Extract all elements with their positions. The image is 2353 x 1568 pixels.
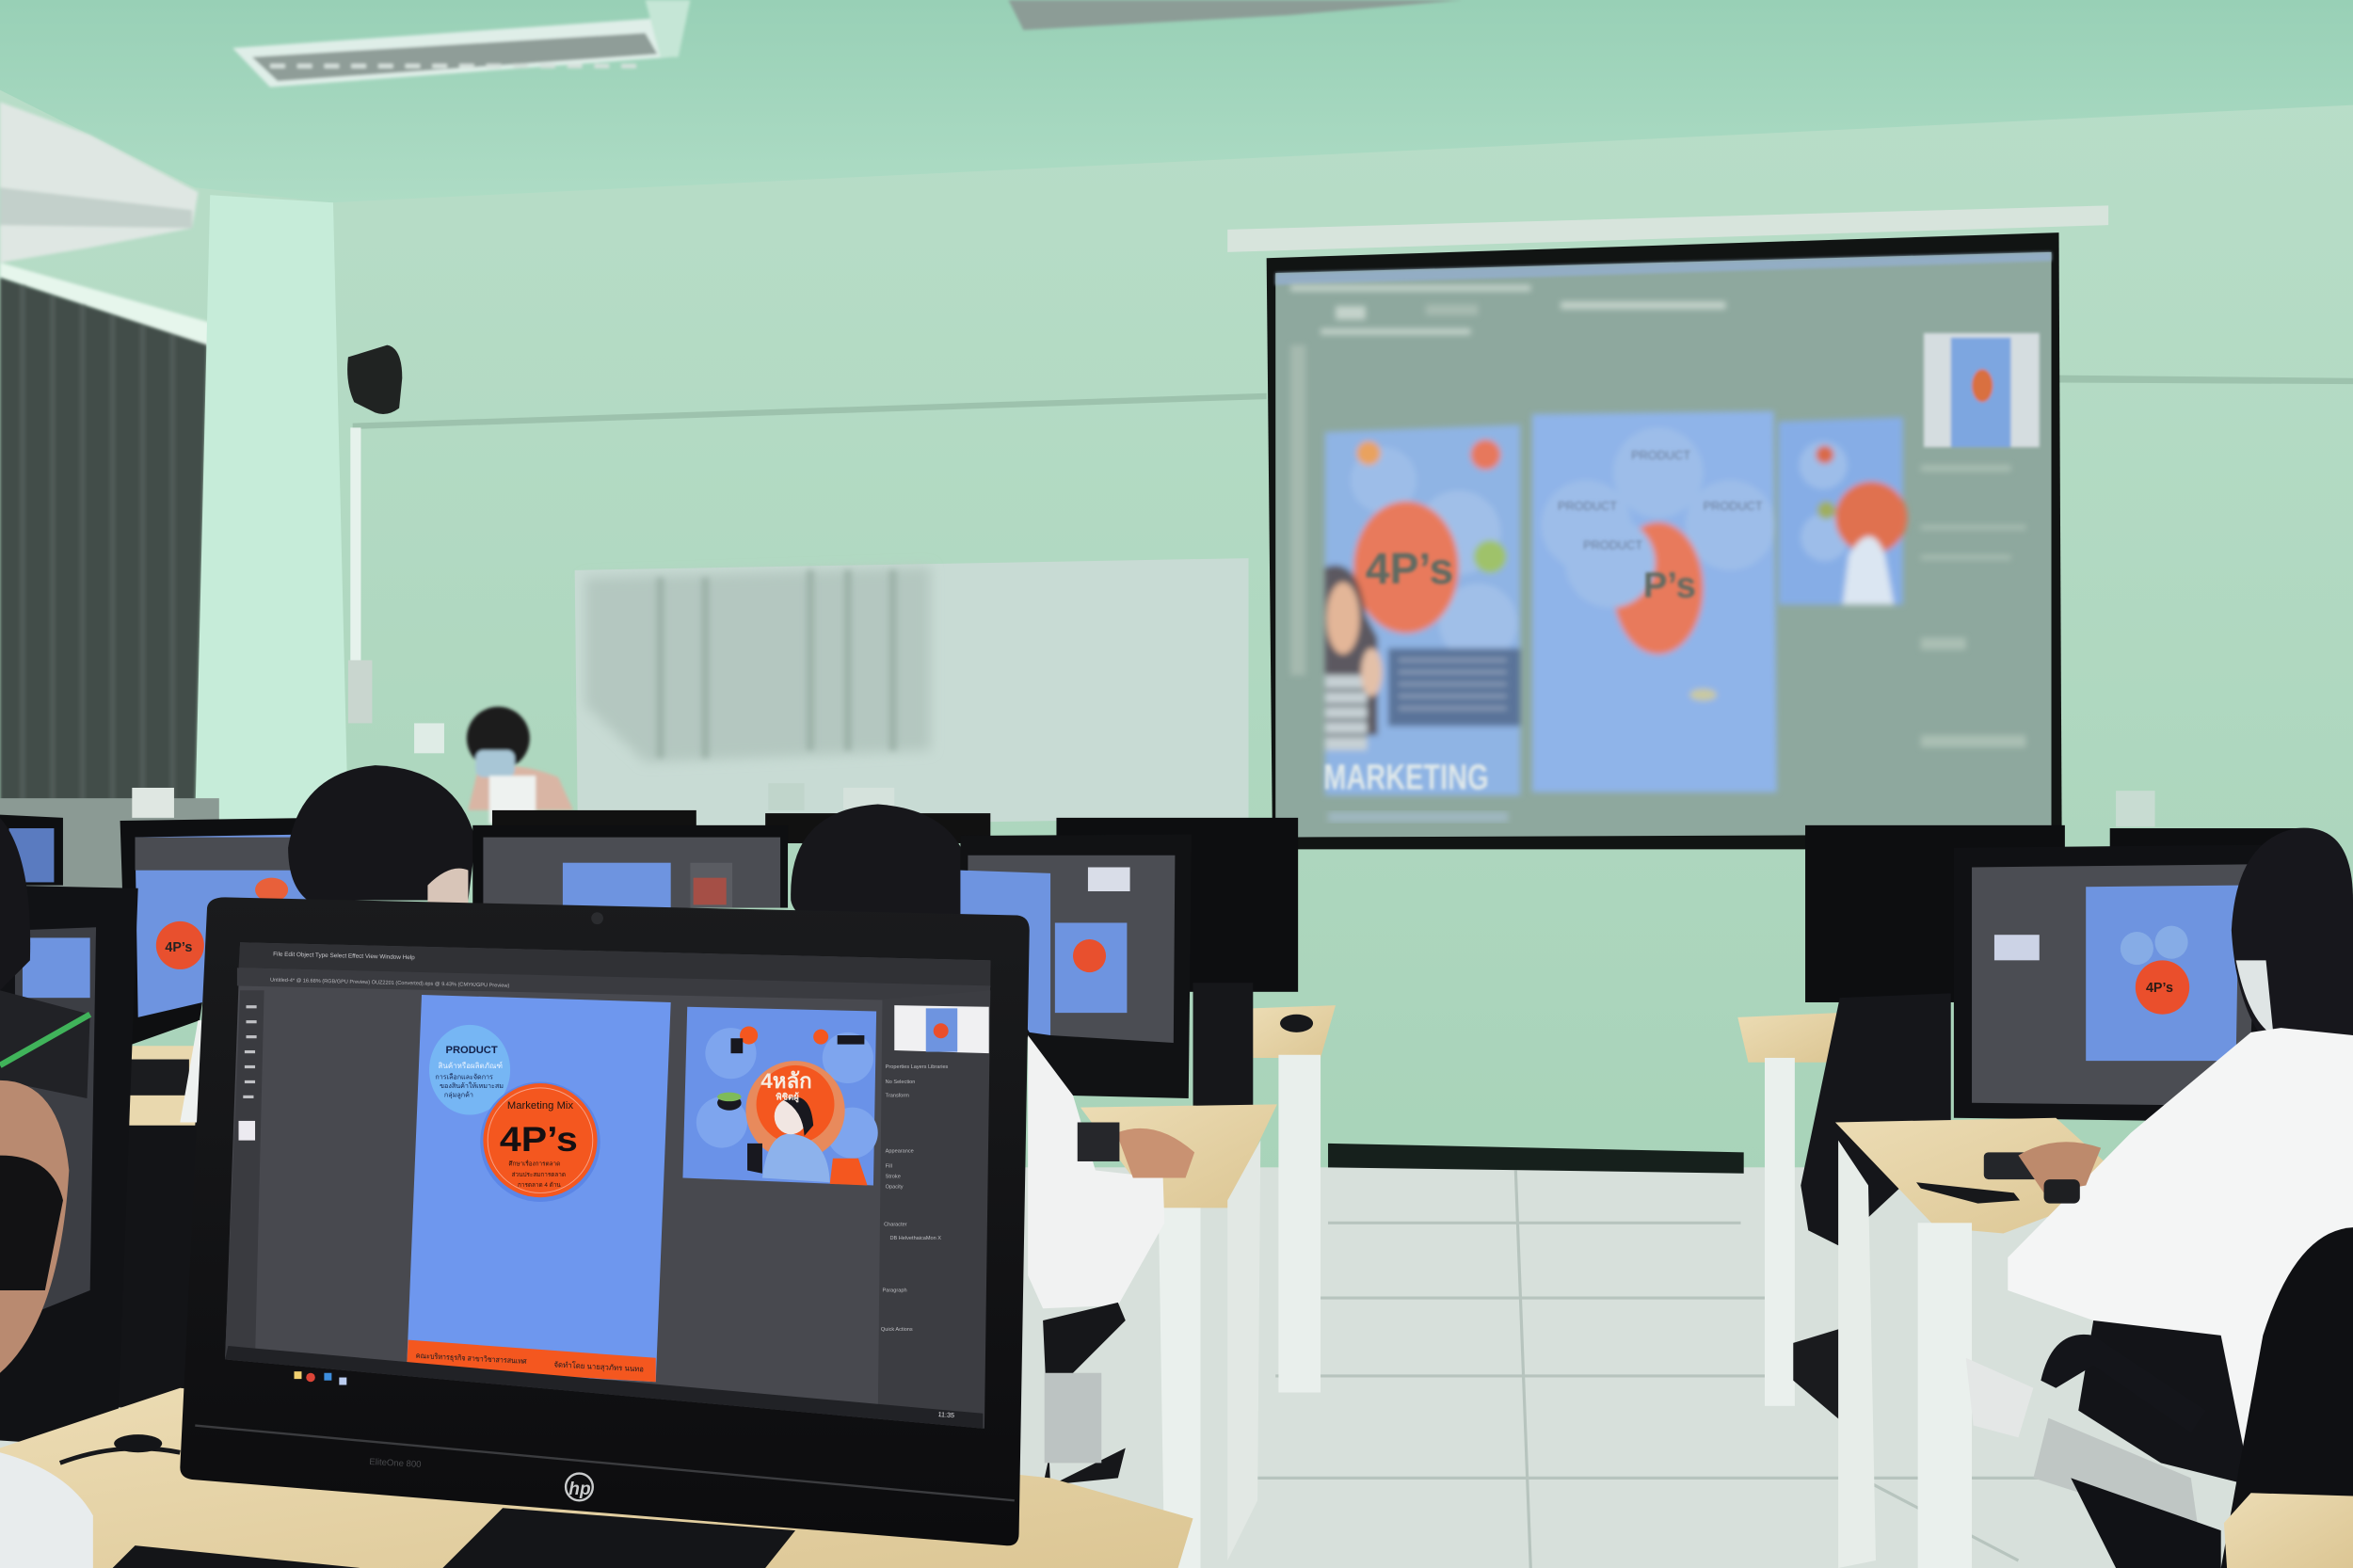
projected taskbar [1328, 811, 1508, 823]
ceiling light right [1008, 0, 1464, 30]
orange 4P's circle [480, 1081, 600, 1202]
properties labels: Paragraph [883, 1288, 907, 1294]
projected menu bars [1290, 285, 1726, 675]
projected side panel [1921, 465, 2025, 747]
right monitor: 4P’s [2146, 981, 2173, 996]
right properties panel [878, 990, 990, 1429]
floor [0, 1167, 2353, 1568]
back row black monitors [0, 783, 2305, 1002]
mouse [114, 1434, 162, 1452]
projected product labels: PRODUCT [1558, 499, 1617, 513]
wall moulding line right [2059, 376, 2353, 384]
keyboard edge [113, 1545, 360, 1568]
product circle: ของสินค้าให้เหมาะสม [440, 1081, 504, 1090]
near left person shoulder [0, 1452, 93, 1568]
properties labels: No Selection [886, 1080, 915, 1085]
window blinds [0, 278, 207, 818]
properties labels: Character [884, 1223, 907, 1228]
orange 4P's circle: การตลาด 4 ด้าน [518, 1181, 561, 1189]
navigator thumbnail [894, 1005, 989, 1053]
projected 4P's heading: 4P’s [1366, 544, 1453, 593]
projected product labels: PRODUCT [1704, 499, 1763, 513]
ceiling light left [232, 0, 690, 87]
tab text: Untitled-4* @ 16.68% (RGB/GPU Preview) OUZ2201 (Converted).eps @ 9.43% (CMYK/GPU Preview) [270, 978, 510, 989]
monitor model text: EliteOne 800 [369, 1457, 422, 1470]
far left monitor top [0, 815, 63, 886]
loudspeaker [347, 345, 402, 414]
HP logo [566, 1474, 593, 1500]
left student shirt edge [180, 1020, 204, 1123]
properties labels: Stroke [886, 1174, 901, 1179]
properties labels: Transform [886, 1093, 909, 1098]
properties labels [881, 1064, 949, 1333]
centre desk and student [1028, 1035, 1277, 1568]
projected artboard right [1778, 417, 1907, 604]
left tools panel [225, 990, 264, 1358]
monitor screen [225, 942, 990, 1429]
document tabs [237, 968, 990, 1002]
left middle desk [129, 1046, 202, 1126]
small icons in poster [740, 1026, 758, 1045]
main monitor [180, 897, 1030, 1545]
orange 4P's circle: ศึกษาเรื่องการตลาด [508, 1160, 560, 1168]
poster orange footer [407, 1340, 656, 1382]
orange 4P's circle: 4P’s [500, 1120, 578, 1159]
second row student dark hair [288, 765, 475, 904]
whiteboard [575, 558, 1249, 828]
second row monitor left: 4P’s [165, 940, 192, 955]
HP logo: hp [568, 1480, 591, 1499]
right student [1966, 828, 2353, 1500]
properties labels: Appearance [886, 1148, 914, 1154]
right office chair [2033, 1227, 2353, 1568]
tool glyphs [239, 1005, 257, 1141]
properties labels: Properties Layers Libraries [886, 1064, 949, 1070]
desk keyboard back left [129, 1060, 189, 1096]
taskbar icons [294, 1371, 346, 1385]
socket box [348, 660, 372, 723]
wall switch [414, 723, 444, 753]
product circle: PRODUCT [446, 1045, 498, 1056]
projected product labels: PRODUCT [1631, 448, 1690, 462]
orange 4P's circle: Marketing Mix [507, 1100, 573, 1112]
right far desk [1737, 993, 1951, 1422]
near right desk corner [2224, 1493, 2353, 1568]
app menu bar [239, 942, 990, 987]
second artboard 4 pillars poster [682, 1007, 878, 1185]
properties labels: DB HelvethaicaMon X [889, 1236, 941, 1241]
second student dark hair [791, 805, 971, 930]
properties labels: Fill [886, 1163, 892, 1169]
properties labels: Opacity [886, 1185, 904, 1191]
right desk far [1193, 983, 1336, 1392]
woman illustration [762, 1134, 830, 1182]
second artboard 4 pillars poster: พิชิตผู้ [776, 1092, 799, 1104]
projector screen housing [1227, 205, 2108, 252]
projected artboard centre [1532, 411, 1777, 792]
poster orange footer: คณะบริหารธุรกิจ สาขาวิชาสารสนเทศ [416, 1352, 527, 1366]
projected product labels [1558, 448, 1763, 552]
orange 4P's circle: ส่วนประสมการตลาด [512, 1172, 566, 1178]
webcam [591, 912, 603, 924]
cables [60, 1448, 180, 1463]
projected product labels: PRODUCT [1583, 537, 1642, 552]
projection screen [1267, 232, 2062, 849]
artboard poster [407, 995, 671, 1382]
background teacher [467, 707, 573, 824]
baseboard [1328, 1144, 1744, 1174]
wall column [195, 195, 348, 823]
properties labels: Quick Actions [881, 1327, 913, 1333]
second artboard 4 pillars poster: 4หลัก [760, 1069, 812, 1093]
projected centre 4P's: P’s [1643, 566, 1696, 606]
product circle: สินค้าหรือผลิตภัณฑ์ [438, 1061, 503, 1070]
product circle: กลุ่มลูกค้า [444, 1091, 473, 1098]
wall moulding line [353, 393, 1267, 429]
poster orange footer: จัดทำโดย นายสุวภัทร นนทอ [553, 1359, 644, 1373]
back wall [0, 0, 2353, 1200]
second row monitor left [120, 818, 323, 1046]
projected MARKETING word: MARKETING [1323, 758, 1489, 798]
taskbar [225, 1346, 983, 1429]
right desk near [1835, 1118, 2131, 1568]
menu text: File Edit Object Type Select Effect View Window Help [273, 952, 415, 961]
ceiling [0, 0, 2353, 202]
product circle: การเลือกและจัดการ [435, 1073, 493, 1080]
projected navigator thumbnail [1924, 333, 2040, 447]
monitor stand [442, 1508, 795, 1568]
second row monitor right [960, 834, 1192, 1098]
dark furniture below left monitors [90, 1123, 202, 1407]
second row monitor centre [472, 825, 788, 908]
main desk [0, 1388, 1193, 1568]
taskbar clock: 11:35 [937, 1411, 954, 1419]
air conditioner [0, 102, 210, 348]
product circle [429, 1025, 510, 1115]
right monitor [1954, 845, 2273, 1123]
wall conduit and socket [352, 427, 359, 660]
bezel line [195, 1426, 1015, 1500]
trousers [2078, 1320, 2251, 1485]
near left monitor and person [0, 818, 138, 1448]
projected artboard left [1325, 424, 1520, 795]
